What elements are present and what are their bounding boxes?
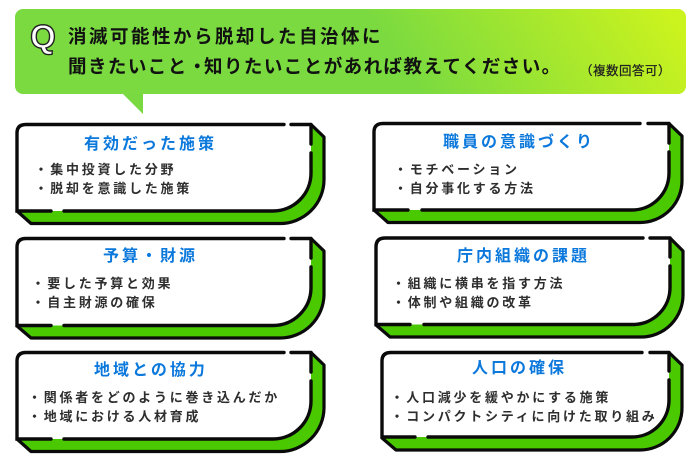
heading: 有効だった施策 — [84, 134, 217, 153]
list — [394, 162, 536, 196]
list: ・集中投資した分野 — [34, 162, 176, 177]
list: ・関係者をどのように巻き込んだか — [28, 390, 280, 405]
question text — [68, 26, 562, 77]
list — [28, 390, 280, 424]
heading: 職員の意識づくり — [443, 133, 595, 151]
panel: 職員の意識づくり — [374, 124, 682, 222]
list: ・脱却を意識した施策 — [34, 181, 192, 196]
question banner — [15, 9, 686, 114]
icon: Q letter: Q — [30, 18, 56, 55]
list: ・人口減少を緩やかにする施策 — [390, 390, 611, 405]
list — [392, 276, 565, 310]
heading: 人口の確保 — [472, 358, 567, 377]
list: ・地域における人材育成 — [28, 409, 201, 424]
question text: 消滅可能性から脱却した自治体に — [68, 26, 383, 47]
heading: 予算・財源 — [103, 246, 198, 265]
list: ・体制や組織の改革 — [392, 295, 534, 310]
note: multiple answers allowed: （複数回答可） — [580, 63, 671, 78]
question text: ・ — [188, 56, 208, 77]
list: ・コンパクトシティに向けた取り組み — [390, 409, 657, 424]
heading: 地域との協力 — [94, 361, 208, 379]
list: ・組織に横串を指す方法 — [392, 276, 565, 291]
list: ・モチベーション — [394, 162, 520, 177]
banner background — [15, 9, 686, 94]
speech bubble tail — [123, 94, 143, 114]
panel: 予算・財源 — [17, 238, 324, 338]
list: ・自主財源の確保 — [32, 295, 158, 310]
panel: 人口の確保 — [382, 352, 682, 450]
question text: 聞きたいこと — [68, 56, 188, 77]
panel: 有効だった施策 — [17, 124, 324, 224]
list — [390, 390, 657, 424]
list: ・自分事化する方法 — [394, 181, 536, 196]
list: ・要した予算と効果 — [32, 276, 173, 291]
panel: 庁内組織の課題 — [376, 238, 683, 337]
panel: 地域との協力 — [17, 352, 324, 452]
list — [32, 276, 173, 310]
list — [34, 162, 192, 196]
question text: 知りたいことがあれば教えてください。 — [204, 56, 562, 77]
heading: 庁内組織の課題 — [457, 247, 590, 265]
